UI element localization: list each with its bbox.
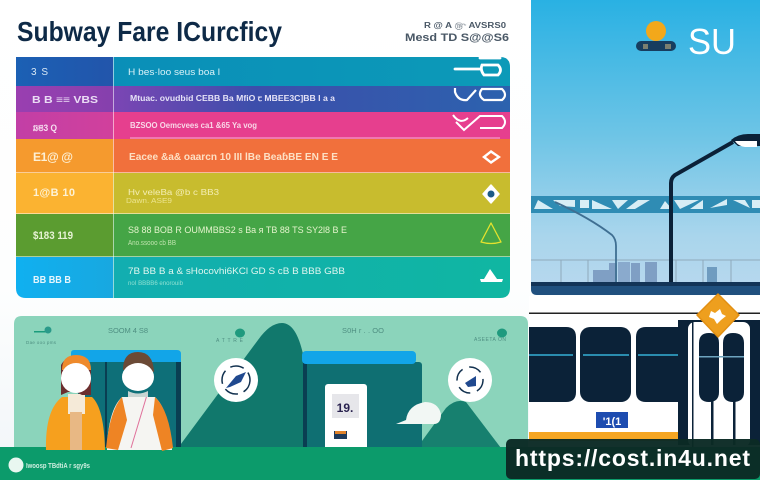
kiosk booth (302, 351, 422, 452)
row 1: H bes·loo seus boa l (128, 67, 220, 77)
row 6: $183 119 (33, 230, 73, 242)
icon: diamond badge (483, 185, 499, 203)
row 3: BZSOO Oemcvees ca1 &65 Ya vog (130, 121, 257, 130)
small labels: S0H r . . OO (342, 326, 384, 335)
footer text: Iwoosp TBdtiA r sgy9s (26, 463, 90, 470)
street lamp (671, 134, 760, 282)
row 4: Eacee &a& oaarcn 10 III lBe BeaɓBE EN E E (129, 152, 338, 163)
icon: yellow triangle (481, 223, 501, 244)
left booth (71, 350, 181, 450)
url badge (506, 439, 760, 479)
header note: R @ A ௹ AVSRS0 (424, 21, 507, 30)
ticket machine (325, 384, 367, 452)
panel: train (529, 294, 760, 456)
title: Subway Fare ICurcficy (17, 16, 282, 47)
route sign (596, 412, 628, 428)
icon: circle badge 1 (214, 358, 258, 402)
row 2: B B ≡≡ VBS (32, 95, 98, 106)
small labels: ASEETA ON (474, 337, 506, 343)
cloud (396, 402, 441, 424)
row 4: E1@ @ (33, 150, 73, 164)
header note (405, 21, 509, 44)
row 2: Mtuac. ovudbid CEBB Ba MfiO ꞇ MBEE3C]BB I a a (130, 94, 336, 103)
row 3 (16, 112, 510, 139)
orange stripe (529, 432, 681, 441)
small labels: Dae ooo pms (26, 340, 57, 345)
icon: orange diamond (697, 294, 739, 337)
row 4 (16, 139, 510, 173)
footer band (0, 447, 760, 480)
row 5: 1@B 10 (33, 187, 75, 199)
city skyline (593, 262, 717, 282)
row 7: 7B BB B a & sHocovhi6KCl GD S cB B BBB GBB (128, 266, 345, 276)
row 5: Dawn. ASE9 (126, 198, 172, 205)
train windows (529, 327, 680, 402)
truss bridge (531, 196, 760, 213)
url badge: https://cost.in4u.net (515, 445, 750, 471)
row 6 (16, 214, 510, 257)
row 1: 3 S (31, 67, 49, 78)
row 7: noI BBBB6 enorouib (128, 281, 184, 287)
panel: skyline (531, 0, 760, 295)
route sign: '1(1 (603, 416, 621, 428)
row 5 (16, 173, 510, 214)
icon: circle badge 2 (448, 358, 492, 402)
panel: station scene (14, 316, 528, 452)
row 6: Ano.ssooo cb BB (128, 240, 176, 247)
small street lamp (555, 202, 616, 282)
row 7 (16, 257, 510, 298)
railings (531, 260, 760, 282)
header note: Mesd TD S@@S6 (405, 32, 509, 44)
row 1 (16, 57, 510, 86)
small labels: ATTRE (216, 338, 244, 344)
person 1 (46, 355, 105, 450)
small labels: SOOM 4 S8 (108, 326, 148, 335)
footer logo (8, 458, 24, 472)
row 6: S8 88 BOB R OUMMBBS2 s Ba ᴙ TB 88 TS SY2l8 B E (128, 225, 347, 235)
small labels (26, 326, 507, 345)
big mountain (175, 323, 303, 452)
fare table (16, 57, 510, 298)
small mountain (422, 400, 500, 447)
row 3: ឆଞ3 Q (33, 123, 57, 133)
icon: sun logo (636, 21, 676, 51)
column divider (113, 57, 114, 298)
row 7: BB BB B (33, 275, 71, 286)
row 5: Hv veleBa @b ᴄ BB3 (128, 188, 220, 197)
ticket machine: 19. (337, 401, 353, 415)
train door (678, 320, 760, 447)
row 2 (16, 86, 510, 112)
person 2 (106, 352, 173, 451)
logo text: SU (688, 21, 736, 62)
platform band (531, 286, 760, 295)
icon: white pyramid (480, 269, 503, 282)
